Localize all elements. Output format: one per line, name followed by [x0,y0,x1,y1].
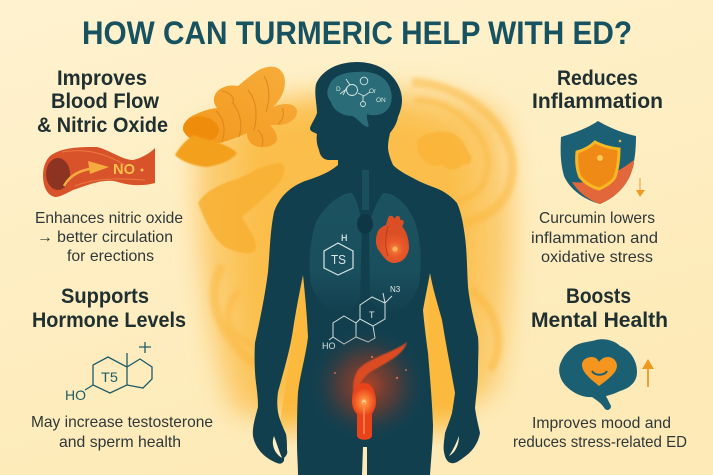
thumb gap right [449,436,459,456]
hexagon TS molecule: TS [331,252,346,267]
description: oxidative stress [541,249,653,266]
description: Improves mood and [532,415,671,432]
faded brain shape [417,131,471,170]
panel: blood flow and nitric oxide [35,67,183,265]
description [513,415,687,451]
panel: hormone levels [31,285,213,451]
description: reduces stress-related ED [513,434,687,451]
heading: Reduces [557,67,638,90]
glowing erection area [308,327,428,443]
heading: Inflammation [532,90,663,113]
panel: reduces inflammation [531,67,663,266]
lungs and airway [310,170,421,313]
icon: brain with heart [559,339,654,410]
icon: T5 molecule: T5 [101,369,118,385]
faded turmeric rhizome [198,163,284,253]
thumb gap left [273,436,282,458]
icon: heart [376,216,409,263]
heading: Supports [61,285,149,308]
description: Curcumin lowers [539,210,655,227]
description: → better circulation [37,229,173,246]
brain with molecule: Or [369,88,377,95]
panel: mental health [513,285,687,451]
description: May increase testosterone [31,414,213,431]
heading [37,67,168,137]
icon: turmeric root and powder [175,67,297,167]
heading: Mental Health [531,309,668,332]
icon: blood vessel [43,147,155,197]
icon: T5 molecule: HO [65,387,86,403]
steroid molecule [322,285,401,351]
heading: Hormone Levels [32,309,186,332]
hexagon TS molecule: H [341,233,348,243]
title: HOW CAN TURMERIC HELP WITH ED? [82,15,632,51]
description [35,210,183,265]
decorative swirl rings [214,82,513,370]
arm gap shading [272,272,470,475]
description: and sperm health [59,434,181,451]
steroid molecule: HO [322,341,336,351]
description: inflammation and [531,230,658,247]
hexagon TS molecule [324,233,353,275]
description: Enhances nitric oxide [35,210,183,227]
heading: Improves [57,67,147,90]
description: for erections [67,248,154,265]
steroid molecule: T [369,310,375,320]
heading: Blood Flow [51,90,160,113]
background glow [197,90,512,421]
icon: T5 molecule [65,342,152,403]
description [531,210,658,266]
brain with molecule: D [336,86,341,93]
heading: Boosts [566,285,631,308]
heading [532,67,663,113]
icon: blood vessel: NO [113,161,135,178]
body outline [253,62,480,475]
human silhouette [253,62,480,475]
description [31,414,213,451]
brain with molecule: ON [376,97,386,104]
icon: shield [561,121,645,204]
steroid molecule: N3 [390,285,401,294]
heading [32,285,186,332]
heading: & Nitric Oxide [37,114,168,137]
brain with molecule [327,72,392,127]
heading [531,285,668,332]
